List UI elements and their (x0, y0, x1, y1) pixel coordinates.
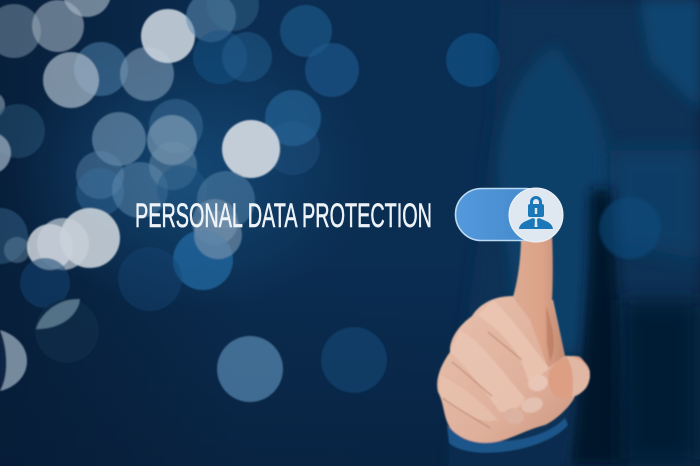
finger creases (443, 332, 522, 428)
finger knuckle shading (546, 305, 554, 362)
fist (437, 296, 590, 443)
switch knob (509, 188, 563, 242)
suit jacket and sleeve (449, 0, 700, 466)
switch track (456, 188, 552, 240)
fingernails (526, 373, 550, 393)
headline: PERSONAL DATA PROTECTION (135, 197, 432, 235)
shirt cuff (447, 418, 568, 453)
hand pointing at switch (437, 235, 590, 453)
icon: padlock and businessman (519, 196, 553, 229)
index finger (513, 235, 565, 368)
toggle switch (456, 188, 563, 242)
bokeh lights (0, 0, 500, 402)
thumb (548, 356, 589, 398)
